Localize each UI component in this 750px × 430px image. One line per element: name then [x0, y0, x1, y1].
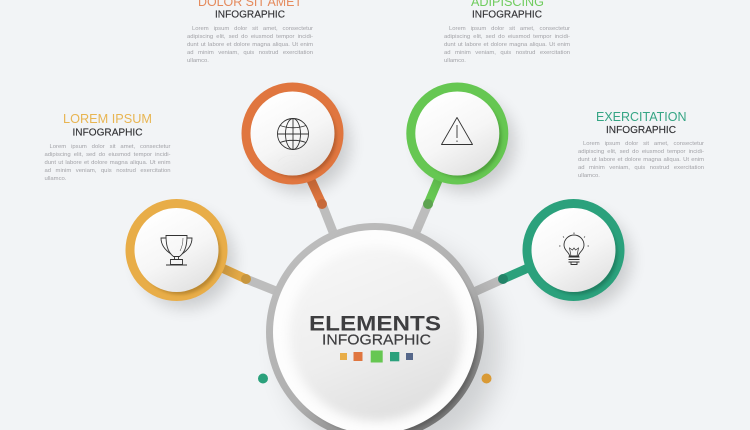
small dot: amber	[482, 374, 492, 384]
text block: adipiscing	[444, 26, 570, 64]
node: yellow circle	[126, 199, 234, 308]
heading: dolor sit amet: INFOGRAPHIC	[215, 9, 285, 21]
text block: exercitation: ullamco.	[578, 173, 600, 179]
icon: trophy	[161, 236, 192, 265]
connector: yellow	[222, 268, 276, 291]
heading: adipiscing: INFOGRAPHIC	[472, 9, 542, 21]
text block: exercitation	[578, 141, 704, 179]
central circle	[266, 223, 500, 430]
text block: exercitation: adipiscing elit, sed do eiusmod tempor incidi-	[578, 149, 704, 155]
heading: lorem ipsum: LOREM IPSUM	[63, 111, 152, 126]
icon: warning triangle	[442, 118, 472, 144]
text block: adipiscing: ad minim veniam, quis nostrud exercitation	[444, 50, 570, 56]
text block: lorem ipsum: ad minim veniam, quis nostrud exercitation	[44, 168, 170, 174]
connector: teal	[474, 268, 528, 292]
text block: dolor sit amet: adipiscing elit, sed do eiusmod tempor incidi-	[187, 34, 313, 40]
text block: lorem ipsum: ullamco.	[44, 176, 66, 182]
heading: exercitation	[596, 109, 686, 136]
text block: lorem ipsum: dunt ut labore et dolore magna aliqua. Ut enim	[44, 160, 170, 166]
text block: dolor sit amet: dunt ut labore et dolore magna aliqua. Ut enim	[187, 42, 313, 48]
heading: adipiscing	[471, 0, 544, 21]
text block: adipiscing: ullamco.	[444, 58, 466, 64]
text block: dolor sit amet: ullamco.	[187, 58, 209, 64]
centre title	[309, 312, 441, 348]
centre title: INFOGRAPHIC	[322, 332, 431, 348]
icon reflection: globe	[278, 155, 308, 166]
text block: dolor sit amet	[187, 26, 313, 64]
node: teal circle	[522, 199, 631, 308]
heading: exercitation: EXERCITATION	[596, 109, 686, 124]
node: orange circle	[242, 82, 350, 192]
text block: lorem ipsum: Lorem ipsum dolor sit amet, consectetur	[50, 144, 170, 150]
centre title: ELEMENTS	[309, 312, 441, 336]
heading: lorem ipsum: INFOGRAPHIC	[72, 126, 143, 138]
heading: lorem ipsum	[63, 111, 152, 138]
small dot: teal	[258, 374, 268, 384]
text block: dolor sit amet: ad minim veniam, quis nostrud exercitation	[187, 50, 313, 56]
text block: exercitation: Lorem ipsum dolor sit amet, consectetur	[583, 141, 704, 147]
icon: globe	[278, 118, 308, 150]
text block: adipiscing: dunt ut labore et dolore magna aliqua. Ut enim	[444, 42, 570, 48]
text block: exercitation: dunt ut labore et dolore magna aliqua. Ut enim	[578, 157, 704, 163]
text block: lorem ipsum: adipiscing elit, sed do eiusmod tempor incidi-	[44, 152, 170, 158]
node: green circle	[406, 82, 515, 192]
text block: dolor sit amet: Lorem ipsum dolor sit amet, consectetur	[192, 26, 313, 32]
connector: green	[416, 178, 439, 232]
text block: adipiscing: adipiscing elit, sed do eiusmod tempor incidi-	[444, 34, 570, 40]
heading: exercitation: INFOGRAPHIC	[606, 124, 676, 136]
text block: adipiscing: Lorem ipsum dolor sit amet, consectetur	[449, 26, 570, 32]
colour squares	[340, 350, 413, 362]
icon: light bulb	[559, 232, 589, 264]
text block: exercitation: ad minim veniam, quis nostrud exercitation	[578, 165, 704, 171]
heading: dolor sit amet	[198, 0, 302, 21]
text block: lorem ipsum	[44, 144, 170, 182]
connector: orange	[310, 178, 333, 232]
